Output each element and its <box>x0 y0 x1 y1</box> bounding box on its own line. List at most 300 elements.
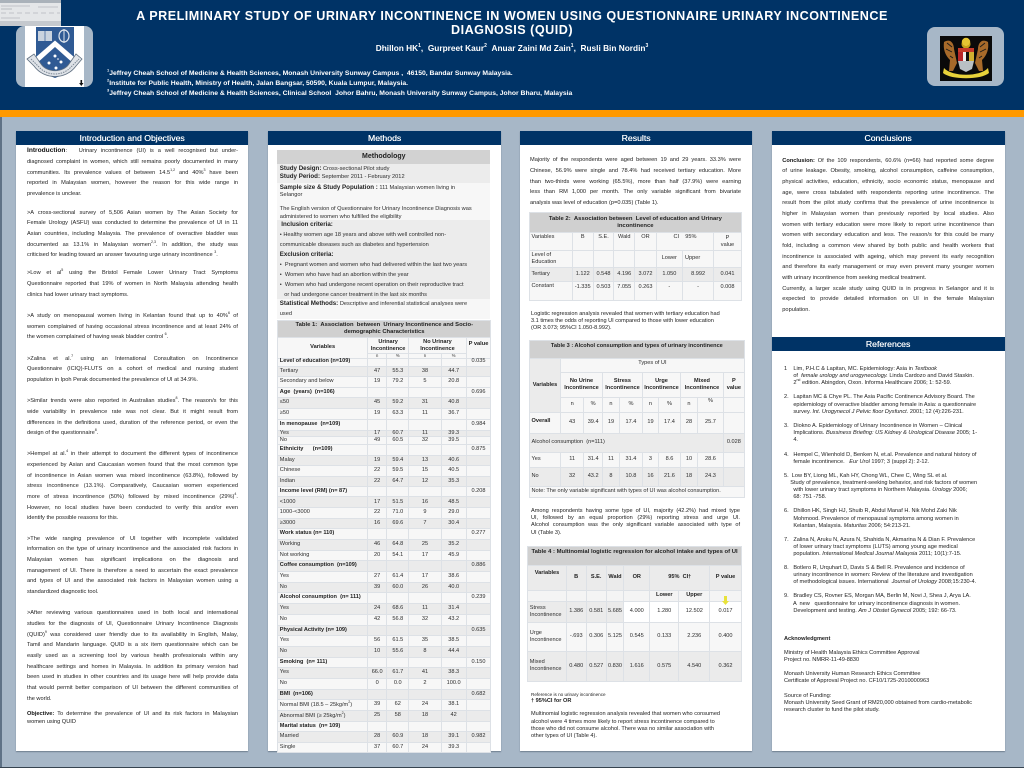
text: QUID questionnaire: the world. <box>27 696 51 702</box>
table 2: level of education and urinary incontinence <box>529 212 742 301</box>
table 1: association between UI and socio-demographic characteristics: Yes <box>280 573 289 579</box>
text: introduction: prevalence is unclear. <box>27 191 82 197</box>
text: Kelantan study: >A study on menopausal women living in Kelantan found that up to 40%6 of <box>27 311 238 319</box>
panel: Introduction and Objectives <box>16 131 248 751</box>
table 3: alcohol consumption and types of urinary incontinence: 0.028 <box>727 439 741 445</box>
table 1: association between UI and socio-demographic characteristics: 69.6 <box>392 520 403 526</box>
table 4: multinomial logistic regression: 95% CI† <box>668 574 691 580</box>
table 1: association between UI and socio-demographic characteristics: 59.5 <box>392 467 403 473</box>
table 1: association between UI and socio-demographic characteristics <box>277 320 491 753</box>
inclusion and exclusion criteria <box>277 220 490 299</box>
table 1: association between UI and socio-demographic characteristics: Smoking (n= 111) <box>280 659 327 665</box>
table 3: alcohol consumption and types of urinary incontinence: P <box>732 378 736 384</box>
table 1: association between UI and socio-demographic characteristics: 59.4 <box>392 457 403 463</box>
table 1: association between UI and socio-demographic characteristics: Incontinence <box>371 346 405 352</box>
table 2: level of education and urinary incontinence: -1.335 <box>575 284 591 290</box>
table 3: alcohol consumption and types of urinary incontinence: % <box>628 401 633 407</box>
table 2: level of education and urinary incontinence: CI 95% <box>673 234 696 240</box>
table 1: association between UI and socio-demographic characteristics: 60.5 <box>392 437 403 443</box>
text: Low et al <box>27 268 238 298</box>
table 1: association between UI and socio-demographic characteristics: Ethnicity (n=109) <box>280 446 332 452</box>
reference 4: female incontinence. Eur Urol 1997; 3 (suppl 2): 2-12. <box>793 459 929 465</box>
table 1: association between UI and socio-demographic characteristics: 51.5 <box>392 499 403 505</box>
table 4: multinomial logistic regression: 1.386 <box>569 608 583 614</box>
text: table 4 footnote: † 95%CI for OR <box>531 698 571 704</box>
table 1: association between UI and socio-demographic characteristics: 18 <box>422 712 428 718</box>
table 3: alcohol consumption and types of urinary incontinence: Table 3 : Alcohol consumption and types of urinary incontinence <box>551 343 723 349</box>
text: wide ranging prevalence <box>27 536 238 595</box>
table 1: association between UI and socio-demographic characteristics: 0.0 <box>394 680 402 686</box>
table 1: association between UI and socio-demographic characteristics: ≥50 <box>280 410 289 416</box>
table 1: association between UI and socio-demographic characteristics: 45.9 <box>448 552 459 558</box>
text: Kelantan study <box>27 311 238 340</box>
text: wide ranging prevalence: >The wide ranging prevalence of UI together with incomplete validated <box>27 536 238 542</box>
table 1: association between UI and socio-demographic characteristics: 43.2 <box>448 616 459 622</box>
table 4: multinomial logistic regression: Incontinence <box>530 637 562 643</box>
table 3: alcohol consumption and types of urinary incontinence: Incontinence <box>644 385 679 391</box>
table 3: alcohol consumption and types of urinary incontinence: 32 <box>569 473 575 479</box>
table 2: level of education and urinary incontinence: Table 2: Association between Level of education and Urinary <box>549 216 722 222</box>
table 3: alcohol consumption and types of urinary incontinence: 43.2 <box>588 473 599 479</box>
reference 2: survey. Int. Urogynecol J Pelvic floor Dysfunct. 2001; 12 (4):226-231. <box>793 409 964 415</box>
study design and period <box>277 164 490 183</box>
text: conclusion: expected to provide detailed information on UI in the female Malaysian <box>782 296 994 302</box>
header banner <box>0 0 1024 110</box>
table 1: association between UI and socio-demographic characteristics: 62 <box>395 701 401 707</box>
table 3: alcohol consumption and types of urinary incontinence: 16 <box>647 473 654 479</box>
table 1: association between UI and socio-demographic characteristics: 0.277 <box>471 530 485 536</box>
table 1: association between UI and socio-demographic characteristics: 49 <box>374 437 380 443</box>
table 3: alcohol consumption and types of urinary incontinence: 11 <box>569 456 575 462</box>
text: Low et al: Questionnaire reported that 19% of women in North Malaysia attending health <box>27 281 238 287</box>
panel: Methods <box>268 131 501 751</box>
text: types of UI findings: Among respondents having some type of UI, majority (42.2%) had mixed type <box>531 508 740 514</box>
left edge strip <box>0 117 2 768</box>
reference 8: 8. Botlero R, Urquhart D, Davis S & Bell R. Prevalence and incidence of <box>784 565 965 571</box>
reference 4: 4. Hempel C, Wienhold D, Benken N, et.al. Prevalence and natural history of <box>784 452 976 458</box>
reference 2: epidemiology of overactive bladder among female in Asia: a questionnaire <box>793 402 976 408</box>
table 1: association between UI and socio-demographic characteristics: 24 <box>422 701 428 707</box>
table 3: alcohol consumption and types of urinary incontinence: 19 <box>608 419 614 425</box>
table 1: association between UI and socio-demographic characteristics: 63.3 <box>392 410 403 416</box>
table 3: alcohol consumption and types of urinary incontinence: No <box>532 473 539 479</box>
text: conclusion: of urine leakage. Obesity, smoking, alcohol consumption, caffeine consumption, <box>782 168 994 174</box>
table 1: association between UI and socio-demographic characteristics: 66.0 <box>372 669 383 675</box>
table 1: association between UI and socio-demographic characteristics: 22 <box>374 478 380 484</box>
table 1: association between UI and socio-demographic characteristics: 31.4 <box>448 605 459 611</box>
table 3: alcohol consumption and types of urinary incontinence: Types of UI <box>638 360 667 366</box>
table 1: association between UI and socio-demographic characteristics: 0.635 <box>471 627 485 633</box>
inclusion and exclusion criteria: • Women who have had an abortion within the year <box>280 272 409 278</box>
table 3: alcohol consumption and types of urinary incontinence: Incontinence <box>605 385 640 391</box>
heading: Acknowledgment: Acknowledgment <box>784 636 830 642</box>
table 3: alcohol consumption and types of urinary incontinence: n <box>571 401 574 407</box>
table 1: association between UI and socio-demographic characteristics: 42 <box>374 616 380 622</box>
table 1: association between UI and socio-demographic characteristics: 30.4 <box>448 520 459 526</box>
table 2: level of education and urinary incontinence: 3.072 <box>638 271 652 277</box>
table 3: alcohol consumption and types of urinary incontinence: Mixed <box>694 378 710 384</box>
text: wide ranging prevalence: information on the type of urinary incontinence and the associated risk factors in <box>27 546 238 552</box>
icon: Malaysian coat of arms <box>927 27 1004 86</box>
table 1: association between UI and socio-demographic characteristics: No <box>280 584 287 590</box>
text: types of UI findings: Alcohol consumption was the only significant variable associated with type of <box>531 522 740 528</box>
text: QUID questionnaire <box>27 610 238 702</box>
study design and period: Study Period: September 2011 - February 2012 <box>280 173 405 180</box>
table 1: association between UI and socio-demographic characteristics: 32 <box>422 616 428 622</box>
text: Hempel et al: However, no local studies have been conducted to verify this and/or even <box>27 505 238 511</box>
affiliations <box>107 68 572 97</box>
table 3: alcohol consumption and types of urinary incontinence: 17.4 <box>626 419 636 425</box>
table 1: association between UI and socio-demographic characteristics: 37 <box>374 744 380 750</box>
text: results summary: analysis was level of education (p=0.035) (Table 1). <box>530 200 658 206</box>
university approval: Monash University Human Research Ethics Committee <box>784 671 920 677</box>
sample size: The English version of Questionnaire for Urinary Incontinence Diagnosis was <box>280 206 472 212</box>
table 1: association between UI and socio-demographic characteristics: Yes <box>280 637 289 643</box>
table 1: association between UI and socio-demographic characteristics: 71.0 <box>392 509 403 515</box>
table 1: association between UI and socio-demographic characteristics: Income level (RM) (n= 87) <box>280 488 347 494</box>
icon: thumbnail of table <box>0 0 61 26</box>
table 1: association between UI and socio-demographic characteristics: 0.208 <box>471 488 485 494</box>
table 2: level of education and urinary incontinence: Variables <box>532 234 554 240</box>
table 2: level of education and urinary incontinence: Education <box>532 259 556 265</box>
text: conclusion: result from the pilot study confirms that the prevalence of urine incontinence is <box>782 200 994 206</box>
table 3: alcohol consumption and types of urinary incontinence: 3 <box>649 456 652 462</box>
text: conclusion: physical activities, education, ethnicity, socio economic status, menopause and <box>782 179 994 185</box>
table 1: association between UI and socio-demographic characteristics: 11 <box>422 605 428 611</box>
sample size: Selangor <box>280 192 302 198</box>
table 1: association between UI and socio-demographic characteristics: 17 <box>422 573 428 579</box>
text: ASFU survey: documented as 13.1% in Malaysian women2,3. In addition, the study was <box>27 240 238 248</box>
text: conclusion: higher in Malaysian women than previously reported by local studies. Also <box>782 211 994 217</box>
table 1: association between UI and socio-demographic characteristics: 0.239 <box>471 594 485 600</box>
text: table 4 footnote <box>531 692 606 704</box>
text: table 4 footnote: Reference is no urinary incontinence <box>531 692 606 696</box>
table 1: association between UI and socio-demographic characteristics: Coffee consumption (n=109) <box>280 562 357 568</box>
text: Kelantan study: the women complained of having weak bladder control 6. <box>27 332 168 340</box>
reference 5: Study of prevalence, treatment-seeking behavior, and risk factors of women <box>790 480 977 486</box>
table 1: association between UI and socio-demographic characteristics: 39 <box>374 584 380 590</box>
table 1: association between UI and socio-demographic characteristics: 26 <box>422 584 428 590</box>
table 1: association between UI and socio-demographic characteristics: 18 <box>422 733 428 739</box>
table 2: level of education and urinary incontinence: Level of <box>532 252 551 258</box>
text: conclusion: fold, including a common view shared by both public and health workers that <box>782 243 994 249</box>
table 4: multinomial logistic regression: 0.830 <box>608 663 622 669</box>
table 4: multinomial logistic regression: -.693 <box>570 633 583 639</box>
table 2: level of education and urinary incontinence: Wald <box>618 234 631 240</box>
text: Hempel et al: identify the possible reasons for this. <box>27 515 118 521</box>
table 4: multinomial logistic regression: 0.017 <box>719 608 733 614</box>
table 1: association between UI and socio-demographic characteristics: 40.8 <box>448 399 459 405</box>
table 1: association between UI and socio-demographic characteristics: In menopause (n=109) <box>280 421 340 427</box>
table 4: multinomial logistic regression: 0.400 <box>719 633 733 639</box>
table 4: multinomial logistic regression: Incontinence <box>530 666 562 672</box>
table 1: association between UI and socio-demographic characteristics: No <box>280 437 287 443</box>
table 4: multinomial logistic regression: B <box>574 574 578 580</box>
inclusion and exclusion criteria: • Healthy women age 18 years and above with well controlled non- <box>280 232 446 238</box>
table 1: association between UI and socio-demographic characteristics: 19 <box>374 378 380 384</box>
table 1: association between UI and socio-demographic characteristics: 60.7 <box>392 744 403 750</box>
table 2: level of education and urinary incontinence: 0.008 <box>720 284 734 290</box>
reference 5: 5. Low BY, Liong ML, Kah HY, Chong WL, Chee C, Wing SL et al. <box>784 473 947 479</box>
reference 4 <box>784 452 976 465</box>
text: QUID questionnaire: >After reviewing various questionnaires used in both local and international <box>27 610 238 616</box>
table 1: association between UI and socio-demographic characteristics: No <box>280 616 287 622</box>
table 3: alcohol consumption and types of urinary incontinence: No Urine <box>570 378 593 384</box>
text: logistic regression: Logistic regression analysis revealed that women with tertiary education had <box>531 311 720 317</box>
table 1: association between UI and socio-demographic characteristics: Malay <box>280 457 295 463</box>
table 4: multinomial logistic regression: 4.540 <box>687 663 701 669</box>
text: Hempel et al: stress incontinence (13.1%). Comparatively, Caucasian women experienced <box>27 483 238 489</box>
table 1: association between UI and socio-demographic characteristics: 56.8 <box>392 616 403 622</box>
reference 8: of methodological issues. International Journal of Urology 2008;15:230-4. <box>793 579 976 585</box>
ethics approval <box>784 650 920 663</box>
text: conclusion: women with tertiary education were more likely to report urine incontinence than <box>782 222 994 228</box>
table 3: alcohol consumption and types of urinary incontinence: 31.4 <box>626 456 636 462</box>
table 1: association between UI and socio-demographic characteristics: Yes <box>280 605 289 611</box>
table 1: association between UI and socio-demographic characteristics: 64.8 <box>392 541 403 547</box>
table 3: alcohol consumption and types of urinary incontinence: 25.7 <box>705 419 716 425</box>
table 1: association between UI and socio-demographic characteristics: 35.2 <box>448 541 459 547</box>
table 1: association between UI and socio-demographic characteristics: 0.982 <box>471 733 485 739</box>
affiliations: 3Jeffrey Cheah School of Medicine & Health Sciences, Clinical School Johor Bahru, Monash University Sunway Campus, Johor Bharu, Malaysia <box>107 88 572 97</box>
table 1: association between UI and socio-demographic characteristics: 61.5 <box>392 637 403 643</box>
affiliations: 2Institute for Public Health, Ministry of Health, Jalan Bangsar, 50590, Kuala Lumpur, Malaysia. <box>107 78 408 87</box>
table 1: association between UI and socio-demographic characteristics: Urinary <box>378 339 398 345</box>
text: Australian studies: design of the questionnaire8. <box>27 429 98 436</box>
table 1: association between UI and socio-demographic characteristics: Variables <box>310 344 335 350</box>
table 4: multinomial logistic regression: 0.480 <box>569 663 583 669</box>
source of funding: Source of Funding: <box>784 693 831 699</box>
table 1: association between UI and socio-demographic characteristics: Age (years) (n=106) <box>280 389 335 395</box>
text: Australian studies: >Similar trends were also reported in Australian studies8. The reason/s for this <box>27 397 238 404</box>
table 1: association between UI and socio-demographic characteristics: 39.1 <box>448 733 459 739</box>
table 2: level of education and urinary incontinence: 0.041 <box>720 271 734 277</box>
table 1: association between UI and socio-demographic characteristics: demographic Characteristics <box>344 329 425 335</box>
inclusion and exclusion criteria: or had undergone cancer treatment in the last six months <box>284 292 427 298</box>
text: Australian studies: wide variability in prevalence rate was not clear. But it might result from <box>27 409 238 415</box>
panel: Conclusions <box>772 131 1004 751</box>
table 4: multinomial logistic regression: 0.545 <box>630 633 644 639</box>
text: multinomial regression findings <box>531 711 720 739</box>
table 3: alcohol consumption and types of urinary incontinence: 8.6 <box>666 456 673 462</box>
table 1: association between UI and socio-demographic characteristics: 38.3 <box>448 669 459 675</box>
text: results summary: than two-thirds were working (65.5%), more than half (37.9%) were earning <box>530 179 741 185</box>
table 4: multinomial logistic regression: Wald <box>608 574 622 580</box>
table 4: multinomial logistic regression: Urge <box>530 630 542 636</box>
text: QUID questionnaire: been used in studies in other countries and its usage here will help provide data <box>27 674 238 680</box>
table 1: association between UI and socio-demographic characteristics: 36.7 <box>448 410 459 416</box>
statistical methods <box>280 300 467 316</box>
sample size: administered to women who fulfilled the eligibility <box>280 214 401 220</box>
table 4: multinomial logistic regression: 0.581 <box>589 608 603 614</box>
table 2: level of education and urinary incontinence: OR <box>641 234 650 240</box>
table 1: association between UI and socio-demographic characteristics: 39.5 <box>448 437 459 443</box>
table 3: alcohol consumption and types of urinary incontinence: 21.6 <box>664 473 675 479</box>
text: objective <box>27 711 238 725</box>
table 3: alcohol consumption and types of urinary incontinence <box>529 340 745 498</box>
reference 9 <box>784 593 971 614</box>
table 1: association between UI and socio-demographic characteristics: 38 <box>422 368 428 374</box>
heading: Results: Results <box>622 133 650 143</box>
table 3: alcohol consumption and types of urinary incontinence: n <box>649 401 652 407</box>
text: multinomial regression findings: Multinomial logistic regression analysis revealed that women who consumed <box>531 711 720 717</box>
heading: Conclusions: Conclusions <box>864 133 912 143</box>
text: ASFU survey: >A cross-sectional survey of 5,506 Asian women by The Asian Society for <box>27 210 238 216</box>
table 1: association between UI and socio-demographic characteristics: 64.7 <box>392 478 403 484</box>
table 1: association between UI and socio-demographic characteristics: 39.3 <box>448 430 459 436</box>
table 1: association between UI and socio-demographic characteristics: 61.4 <box>392 573 403 579</box>
table 2: level of education and urinary incontinence: 0.503 <box>596 284 610 290</box>
table 1: association between UI and socio-demographic characteristics: 39.3 <box>448 744 459 750</box>
table 1: association between UI and socio-demographic characteristics: Table 1: Association between Urinary Incontinence and Socio- <box>296 322 473 328</box>
text: objective: women using QUID <box>27 719 76 725</box>
table 4: multinomial logistic regression: P value <box>716 574 735 580</box>
text: introduction: Introduction: Urinary incontinence (UI) is a well recognised but under- <box>27 147 238 154</box>
table 1: association between UI and socio-demographic characteristics: P value <box>469 341 488 347</box>
text: Hempel et al <box>27 450 238 521</box>
table 1: association between UI and socio-demographic characteristics: 47 <box>374 368 380 374</box>
table 4: multinomial logistic regression: S.E. <box>591 574 601 580</box>
references list <box>784 366 977 614</box>
table 2: level of education and urinary incontinence: value <box>721 242 734 248</box>
table 1: association between UI and socio-demographic characteristics: 68.6 <box>392 605 403 611</box>
table 1: association between UI and socio-demographic characteristics: 0.696 <box>471 389 485 395</box>
reference 5: 68: 751 -758. <box>793 494 826 500</box>
table 2: level of education and urinary incontinence: - <box>697 284 699 290</box>
affiliations: 1Jeffrey Cheah School of Medicine & Health Sciences, Monash University Sunway Campus , 46150, Bandar Sunway Malaysia. <box>107 68 513 77</box>
table 1: association between UI and socio-demographic characteristics: 42 <box>451 712 457 718</box>
text: Low et al: >Low et al5 using the Bristol Female Lower Urinary Tract Symptoms <box>27 269 238 276</box>
table 3: alcohol consumption and types of urinary incontinence: 11 <box>608 456 614 462</box>
reference 6: Mohmood. Prevalence of menopausal symptoms among women in <box>793 516 959 522</box>
table 3: alcohol consumption and types of urinary incontinence: 31.4 <box>588 456 599 462</box>
table 1: association between UI and socio-demographic characteristics: 19 <box>374 457 380 463</box>
reference 7: population. International Medical Journal Malaysia 2011; 10(1):7-15. <box>793 551 961 557</box>
table 4: multinomial logistic regression: 0.306 <box>589 633 603 639</box>
table 4: multinomial logistic regression: 1.616 <box>630 663 644 669</box>
table 3: alcohol consumption and types of urinary incontinence: Variables <box>533 382 557 388</box>
table 3: alcohol consumption and types of urinary incontinence: 10.8 <box>626 473 636 479</box>
table 1: association between UI and socio-demographic characteristics: <1000 <box>280 499 296 505</box>
reference 3: Implications. Bussiness Briefing: US Kidney & Urological Disease 2005; 1- <box>793 430 977 436</box>
inclusion and exclusion criteria: Exclusion criteria: <box>280 251 333 258</box>
source of funding: research cluster to fund the pilot study. <box>784 707 880 713</box>
table 1: association between UI and socio-demographic characteristics: 17 <box>374 499 380 505</box>
table 2: level of education and urinary incontinence: P <box>726 234 729 240</box>
table 1: association between UI and socio-demographic characteristics: % <box>396 353 400 358</box>
inclusion and exclusion criteria: Inclusion criteria: <box>281 221 333 228</box>
table 3: alcohol consumption and types of urinary incontinence: 28.6 <box>705 456 716 462</box>
reference 3: 4. <box>793 437 798 443</box>
table 1: association between UI and socio-demographic characteristics: Alcohol consumption (n= 111) <box>280 594 361 600</box>
table 1: association between UI and socio-demographic characteristics: 0.035 <box>471 358 485 364</box>
table 3: alcohol consumption and types of urinary incontinence: 18 <box>686 473 692 479</box>
table 2: level of education and urinary incontinence: - <box>668 284 670 290</box>
table 4: multinomial logistic regression: 12.502 <box>686 608 703 614</box>
table 1: association between UI and socio-demographic characteristics: 17 <box>374 430 380 436</box>
table 1: association between UI and socio-demographic characteristics: 55.3 <box>392 368 403 374</box>
reference 8: urinary incontinence in women: Review of the literature and investigation <box>793 572 973 578</box>
text: conclusion: age, were cross tabulated with respondents reporting urine incontinence. The <box>782 190 994 196</box>
text: results summary <box>530 157 741 206</box>
table 3: alcohol consumption and types of urinary incontinence: 39.4 <box>588 419 599 425</box>
table 1: association between UI and socio-demographic characteristics: 13 <box>422 457 428 463</box>
table 3: alcohol consumption and types of urinary incontinence: Incontinence <box>564 385 599 391</box>
table 1: association between UI and socio-demographic characteristics: Incontinence <box>420 346 455 352</box>
table 2: level of education and urinary incontinence: 0.263 <box>638 284 652 290</box>
table 1: association between UI and socio-demographic characteristics: 40.5 <box>448 467 459 473</box>
table 1: association between UI and socio-demographic characteristics: 15 <box>422 467 428 473</box>
table 2: level of education and urinary incontinence: Tertiary <box>532 271 550 277</box>
table 1: association between UI and socio-demographic characteristics: 22 <box>374 509 380 515</box>
icon: yellow arrow <box>722 596 729 605</box>
heading: Introduction and Objectives <box>16 131 248 145</box>
table 1: association between UI and socio-demographic characteristics: 20.8 <box>448 378 459 384</box>
text: Hempel et al: >Hempel at al.4 in their attempt to document the different types of incontinence <box>27 450 238 457</box>
reference 5: with lower urinary tract symptoms in Northern Malaysia. Urology 2006; <box>793 487 967 493</box>
table 1: association between UI and socio-demographic characteristics: 35 <box>422 637 428 643</box>
table 1: association between UI and socio-demographic characteristics: 19 <box>374 410 380 416</box>
table 2: level of education and urinary incontinence: incontinence <box>617 222 654 228</box>
text: multinomial regression findings: other types of UI (Table 4). <box>531 733 597 739</box>
table 1: association between UI and socio-demographic characteristics: 40.6 <box>448 457 459 463</box>
title <box>136 9 888 37</box>
table 2: level of education and urinary incontinence: Lower <box>662 255 677 261</box>
text: wide ranging prevalence: and types of UI and the associated risk factors in Malaysian women using a <box>27 578 238 584</box>
table 4: multinomial logistic regression: Mixed <box>530 659 545 665</box>
table 1: association between UI and socio-demographic characteristics: Normal BMI (18.5 – 25kg/m2) <box>280 700 352 708</box>
table 4: multinomial logistic regression: 0.362 <box>719 663 733 669</box>
table 3: alcohol consumption and types of urinary incontinence: Overall <box>532 418 550 424</box>
table 4: multinomial logistic regression: 5.125 <box>608 633 622 639</box>
reference 1: 1 Lim, P.H.C & Lapitan, MC. Epidemiology: Asia in Textbook <box>784 366 937 372</box>
heading: References: References <box>866 339 910 349</box>
reference 3: 3. Diokno A. Epidemiology of Urinary Incontinence in Women – Clinical <box>784 423 962 429</box>
text: ASFU survey <box>27 210 238 258</box>
text: types of UI findings: UI, followed by an equal proportion (29%) reporting stress and urge UI. <box>531 515 740 521</box>
table 1: association between UI and socio-demographic characteristics: 60.9 <box>392 733 403 739</box>
table 1: association between UI and socio-demographic characteristics: 10 <box>374 648 380 654</box>
reference 6 <box>784 508 959 529</box>
heading: Methodology <box>277 150 490 164</box>
table 2: level of education and urinary incontinence: 1.122 <box>576 271 590 277</box>
orange stripe <box>0 110 1024 117</box>
reference 7 <box>784 537 975 557</box>
table 1: association between UI and socio-demographic characteristics: Yes <box>280 430 289 436</box>
table 1: association between UI and socio-demographic characteristics: 44.7 <box>448 368 459 374</box>
source of funding: Monash University Seed Grant of RM20,000 obtained from cardio-metabolic <box>784 700 972 706</box>
table 2: level of education and urinary incontinence: 7.055 <box>617 284 631 290</box>
reference 2: 2. Lapitan MC & Chye PL. The Asia Pacific Continence Advisory Board. The <box>784 394 975 400</box>
heading: References <box>772 337 1004 351</box>
table 2: level of education and urinary incontinence: B <box>581 234 585 240</box>
table 1: association between UI and socio-demographic characteristics: 45 <box>374 399 380 405</box>
text: Australian studies <box>27 396 238 436</box>
text: multinomial regression findings: alcohol were 4 times more likely to report stress incontinence compared to <box>531 719 715 725</box>
table 1: association between UI and socio-demographic characteristics: 56 <box>374 637 380 643</box>
table 2: level of education and urinary incontinence: 0.548 <box>596 271 610 277</box>
heading: Results <box>520 131 752 145</box>
table 3: alcohol consumption and types of urinary incontinence: Stress <box>614 378 631 384</box>
heading: Methods <box>268 131 501 145</box>
table 1: association between UI and socio-demographic characteristics: 48.5 <box>448 499 459 505</box>
reference 9: A new questionnaire for urinary incontinence diagnosis in women. <box>793 600 960 606</box>
inclusion and exclusion criteria: • Women who had undergone recent operation on their reproductive tract <box>280 282 464 288</box>
text: logistic regression: (OR 3.073; 95%CI 1.050-8.992). <box>531 325 612 331</box>
text: Australian studies: differences in the definitions used, duration of the reference period, or even the <box>27 420 238 426</box>
table 4: multinomial logistic regression: Stress <box>530 605 546 611</box>
text: results summary: Majority of the respondents were aged between 19 and 29 years. 33.3% were <box>530 157 741 163</box>
